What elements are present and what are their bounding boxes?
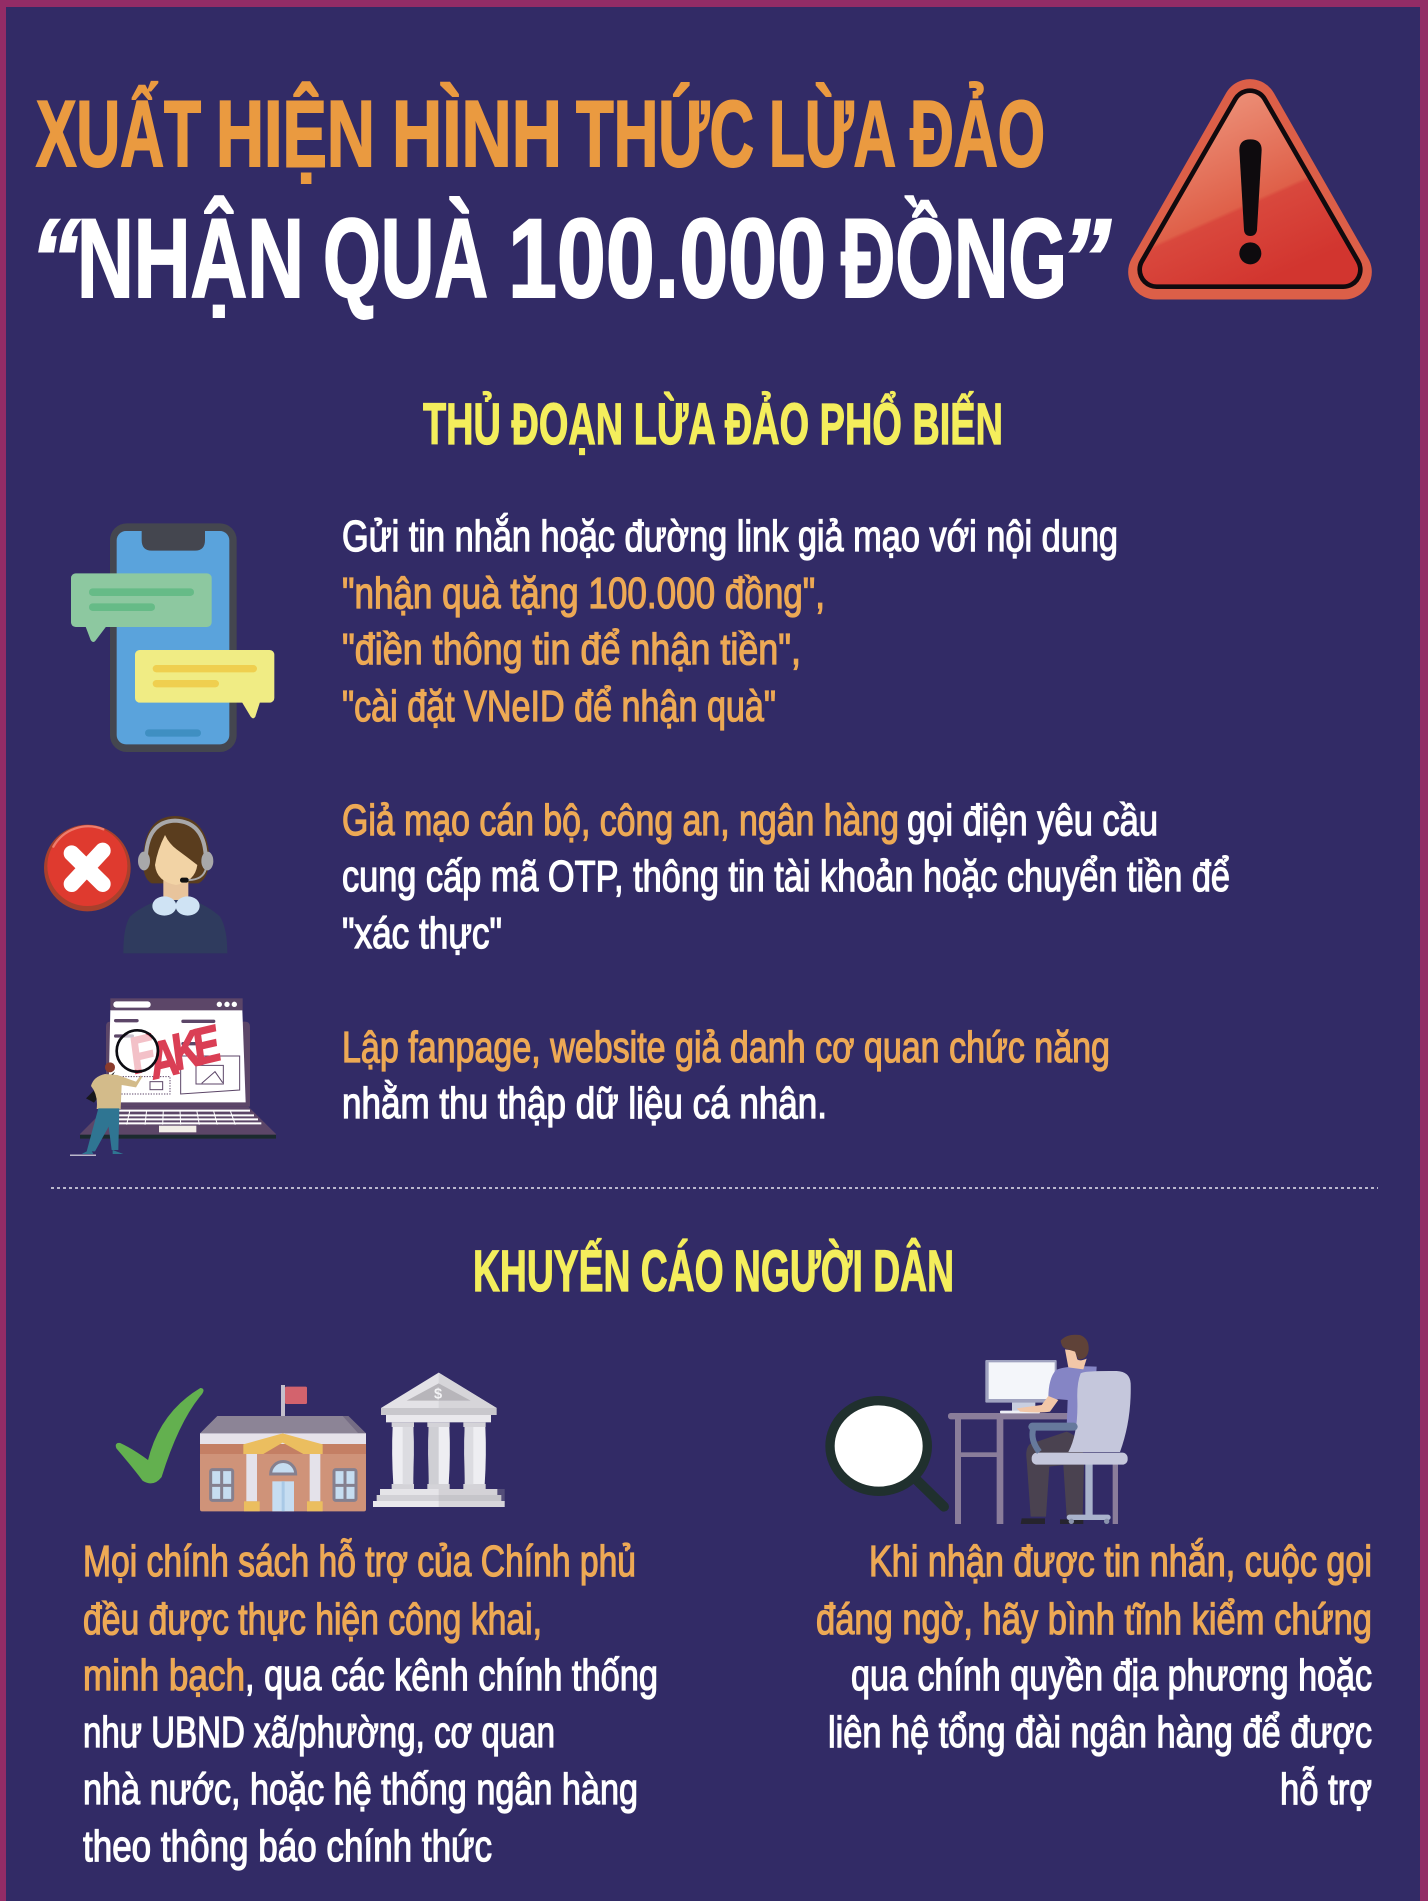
heading: common scam tactics: THỦ ĐOẠN LỪA ĐẢO PHỔ BIẾN [423,392,1003,457]
icon: call-center agent [123,816,227,953]
title line 2 [30,196,1111,321]
icon: red cross button [44,825,131,911]
title line 2: 100.000 [508,196,826,321]
icon: magnifier and person at computer [830,1335,1131,1524]
title [30,80,1111,321]
title line 2: ĐỒNG [841,196,1067,321]
title line 1 [36,80,1045,186]
icon: desk and monitor [948,1360,1071,1524]
text: advice left [83,1537,658,1871]
text: tactic 2 [342,796,1230,958]
text: advice left: đều được thực hiện công khai, [83,1595,542,1644]
text: tactic 3: Lập fanpage, website giả danh cơ quan chức năng [342,1023,1110,1072]
icon: checkmark, government building and bank [117,1373,505,1511]
icon: warning triangle [1156,107,1344,272]
text: advice left: nhà nước, hoặc hệ thống ngân hàng [83,1765,638,1814]
text: tactic 1: "cài đặt VNeID để nhận quà" [342,682,776,731]
title line 1: THỨC [576,81,754,186]
icon: bank [373,1373,505,1507]
icon: phone with chat bubbles [71,523,274,752]
title line 1: ĐẢO [910,81,1045,186]
text: advice left: Mọi chính sách hỗ trợ của Chính phủ [83,1537,636,1586]
title line 1: XUẤT [36,80,201,186]
text: tactic 1: Gửi tin nhắn hoặc đường link giả mạo với nội dung [342,512,1118,561]
text: advice left: như UBND xã/phường, cơ quan [83,1708,555,1757]
text: tactic 1 [342,512,1118,731]
text: tactic 2: "xác thực" [342,909,502,958]
text: tactic 2: gọi điện yêu cầu [907,796,1158,845]
text: tactic 1: "điền thông tin để nhận tiền", [342,625,801,674]
text: advice left: theo thông báo chính thức [83,1822,492,1871]
text: tactic 1: "nhận quà tặng 100.000 đồng", [342,569,825,618]
text: advice left: minh bạch [83,1651,245,1700]
icon: government building [200,1385,366,1511]
text: advice left: , qua các kênh chính thống [245,1651,658,1700]
title line 1: HÌNH [392,81,562,186]
text: advice right [816,1537,1372,1814]
text: advice right: hỗ trợ [1280,1765,1372,1814]
icon: person [1017,1335,1097,1524]
text: dollar sign: $ [434,1387,442,1403]
text: tactic 3: nhằm thu thập dữ liệu cá nhân. [342,1079,827,1128]
title line 2: “ [30,196,80,321]
heading: recommendations to citizens: KHUYẾN CÁO NGƯỜI DÂN [473,1239,954,1304]
icon: fake website on laptop [70,998,276,1156]
title line 1: LỪA [769,81,896,186]
title line 2: NHẬN [77,196,304,321]
icon: green check [117,1389,203,1482]
title line 1: HIỆN [216,81,375,186]
text: tactic 3 [342,1023,1110,1128]
icon: chair [1028,1371,1131,1524]
title line 2: QUÀ [323,196,488,321]
text: FAKE stamp: FAKE [127,1014,223,1090]
icon: magnifier [830,1401,944,1507]
title line 2: ” [1061,196,1111,321]
text: tactic 2: Giả mạo cán bộ, công an, ngân hàng [342,796,899,845]
